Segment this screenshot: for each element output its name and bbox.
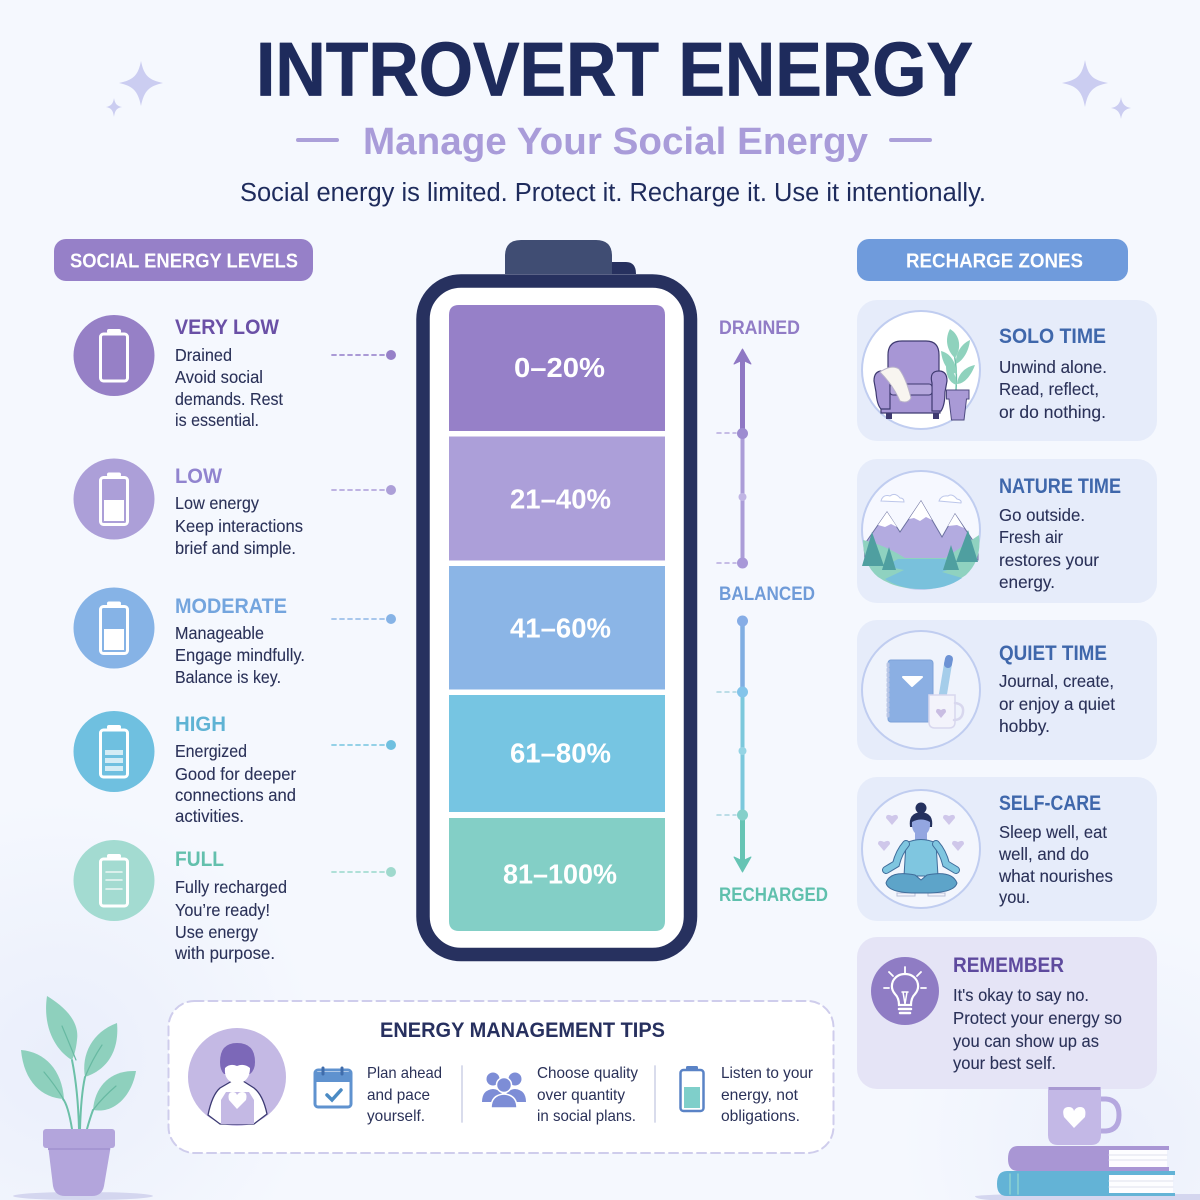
text: self-care: well, and do [998, 844, 1089, 864]
segment 21-40% [449, 436, 665, 560]
icon: meditating person [862, 790, 980, 908]
decoration: potted plant [13, 996, 153, 1200]
panel: self-care [857, 777, 1157, 921]
heading: quiet time: QUIET TIME [999, 642, 1107, 665]
level: low: Keep interactions [175, 516, 303, 536]
decoration: mug and books [975, 1087, 1200, 1200]
level: moderate [74, 588, 396, 687]
text: remember: you can show up as [953, 1031, 1099, 1051]
icon: light bulb [871, 957, 939, 1025]
label: drained: DRAINED [719, 318, 800, 339]
icon: journal and mug [862, 631, 980, 749]
level: full: You’re ready! [175, 900, 270, 920]
heading: social energy levels: SOCIAL ENERGY LEVELS [70, 250, 298, 272]
text: self-care: what nourishes [998, 866, 1113, 886]
energy scale [717, 318, 828, 906]
text: quiet time [999, 671, 1115, 736]
tip: listen to your energy [680, 1065, 814, 1125]
text: nature time: Fresh air [999, 527, 1063, 547]
level: very low: Avoid social [175, 367, 263, 387]
text: quiet time: or enjoy a quiet [999, 694, 1115, 714]
level: very low: Drained [175, 345, 232, 365]
level: high: HIGH [175, 713, 226, 736]
tip: choose quality: Choose quality [537, 1065, 638, 1082]
level: full: with purpose. [174, 943, 275, 963]
text: solo time: or do nothing. [999, 402, 1106, 422]
heading: recharge zones [857, 239, 1128, 281]
text: nature time: restores your [999, 550, 1099, 570]
arrow: down to recharged [717, 616, 751, 872]
heading: solo time: SOLO TIME [999, 325, 1106, 348]
text: remember: Protect your energy so [953, 1008, 1122, 1028]
tip: choose quality: over quantity [537, 1087, 625, 1104]
panel: remember [857, 937, 1157, 1089]
text: solo time [999, 357, 1107, 422]
level: full: Fully recharged [175, 877, 287, 897]
text: self-care: you. [999, 887, 1030, 907]
heading: social energy levels [54, 239, 313, 281]
level: low [74, 458, 396, 558]
level: moderate: MODERATE [175, 595, 287, 618]
heading: remember: REMEMBER [953, 954, 1064, 977]
text: self-care: Sleep well, eat [999, 822, 1107, 842]
icon: armchair and plant [862, 311, 980, 429]
heading: tips: ENERGY MANAGEMENT TIPS [380, 1019, 665, 1042]
segment 41-60% [449, 566, 665, 690]
text: remember: your best self. [953, 1053, 1056, 1073]
level: very low [74, 315, 396, 430]
battery terminal [505, 240, 636, 274]
arrow: up to drained [717, 349, 751, 568]
level: full: FULL [175, 848, 224, 871]
sparkles left [106, 61, 163, 117]
panel: nature time [857, 459, 1157, 603]
text: quiet time: Journal, create, [999, 671, 1114, 691]
tip: choose quality [482, 1065, 638, 1125]
level: low: brief and simple. [175, 538, 296, 558]
tagline: Social energy is limited. Protect it. Recharge it. Use it intentionally. [240, 179, 986, 207]
subtitle: Manage Your Social Energy [363, 121, 868, 163]
level: low: Low energy [175, 493, 259, 513]
level: moderate: Manageable [175, 623, 264, 643]
text: self-care [998, 822, 1113, 907]
panel: social energy levels [74, 315, 396, 963]
level: high: activities. [175, 806, 244, 826]
level: very low: is essential. [175, 410, 259, 430]
level: full [74, 840, 396, 963]
heading: recharge zones: RECHARGE ZONES [906, 250, 1083, 272]
icon: group of people [482, 1072, 526, 1108]
segment 61-80% [449, 695, 665, 812]
panel: quiet time [857, 620, 1157, 760]
segment 81-100% [449, 818, 665, 931]
icon: calendar [315, 1068, 351, 1107]
icon: small battery [680, 1066, 704, 1111]
level: high [74, 711, 396, 826]
heading: self-care: SELF-CARE [999, 792, 1101, 815]
text: quiet time: hobby. [999, 716, 1050, 736]
level: low: LOW [175, 465, 222, 488]
tip: plan ahead: yourself. [367, 1108, 425, 1125]
label: recharged: RECHARGED [719, 885, 828, 906]
title: INTROVERT ENERGY [256, 28, 973, 112]
tip: plan ahead [315, 1065, 442, 1125]
text: solo time: Unwind alone. [999, 357, 1107, 377]
text: nature time: Go outside. [999, 505, 1085, 525]
sparkles right [1062, 60, 1131, 119]
segment 41-60%: 41–60% [510, 612, 611, 644]
level: moderate: Engage mindfully. [175, 645, 305, 665]
tip: plan ahead: and pace [367, 1087, 430, 1104]
level: high: Good for deeper [175, 764, 296, 784]
tip: plan ahead: Plan ahead [367, 1065, 442, 1082]
level: moderate: Balance is key. [175, 667, 281, 687]
text: nature time: energy. [999, 572, 1055, 592]
segment 0-20%: 0–20% [514, 352, 605, 383]
tip: choose quality: in social plans. [537, 1108, 636, 1125]
panel: energy management tips [168, 1001, 834, 1153]
text: nature time [999, 505, 1099, 592]
level: full: Use energy [175, 922, 258, 942]
panel: solo time [857, 300, 1157, 441]
tip: listen to your energy: energy, not [721, 1087, 799, 1104]
icon: mountains and lake [862, 471, 980, 589]
heading: nature time: NATURE TIME [999, 475, 1121, 498]
segment 0-20% [449, 305, 665, 431]
tip: listen to your energy: Listen to your [721, 1065, 814, 1082]
level: high: Energized [175, 741, 247, 761]
segment 21-40%: 21–40% [510, 484, 611, 514]
icon: person with heart [188, 1028, 286, 1126]
battery [423, 240, 690, 954]
battery shell [423, 281, 690, 954]
level: very low: VERY LOW [175, 316, 279, 339]
text: remember: It's okay to say no. [953, 985, 1089, 1005]
label: balanced: BALANCED [719, 584, 815, 605]
level: high: connections and [175, 785, 296, 805]
text: solo time: Read, reflect, [999, 379, 1099, 399]
segment 61-80%: 61–80% [510, 738, 611, 768]
level: very low: demands. Rest [175, 389, 283, 409]
tip: listen to your energy: obligations. [721, 1108, 800, 1125]
text: remember [953, 985, 1122, 1073]
segment 81-100%: 81–100% [503, 858, 617, 890]
